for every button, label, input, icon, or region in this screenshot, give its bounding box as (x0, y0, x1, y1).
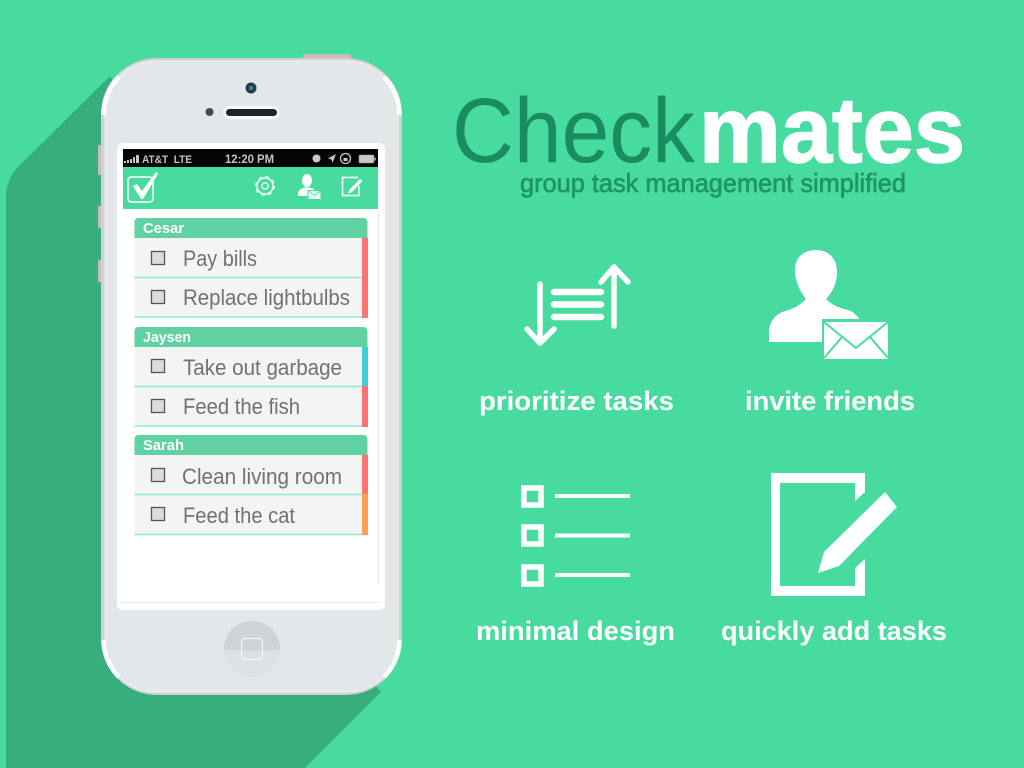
icon: quickly add tasks (771, 473, 897, 596)
icon: invite friends (769, 250, 890, 360)
priority band (362, 238, 368, 318)
status bar (123, 149, 378, 167)
panel: Jaysen group (134, 327, 368, 427)
app nav bar (123, 167, 378, 209)
checkbox: feed the cat (152, 508, 164, 520)
checkbox: clean living room (152, 468, 164, 482)
title word: mates: mates (699, 78, 965, 182)
phone long shadow (6, 76, 381, 768)
group header (134, 218, 368, 238)
task rows (134, 455, 368, 534)
row divider and base line (134, 494, 368, 534)
icon: edit (342, 178, 362, 196)
label: invite friends: invite friends (745, 386, 915, 416)
sensor dot (206, 108, 214, 116)
subtitle: group task management simplified (520, 168, 906, 198)
icon: settings gear (256, 177, 274, 195)
status icons (312, 154, 376, 164)
label: minimal design: minimal design (476, 616, 675, 646)
screen panel (117, 143, 385, 610)
group header (134, 435, 368, 455)
icon: app checkbox logo (128, 172, 158, 202)
title word: Check: Check (452, 80, 696, 182)
label: quickly add tasks: quickly add tasks (721, 616, 947, 646)
icon: minimal design (524, 488, 630, 584)
title (452, 78, 965, 182)
checkbox: replace lightbulbs (152, 290, 164, 304)
group name: Jaysen (143, 329, 191, 346)
task: clean living room: Clean living room (182, 464, 342, 489)
row divider and base line (134, 386, 368, 426)
phone face (105, 61, 398, 692)
camera (246, 82, 256, 94)
checkbox: take out garbage (152, 360, 164, 372)
task: feed the fish: Feed the fish (183, 394, 300, 419)
white corner highlights (104, 77, 400, 677)
task rows (134, 238, 368, 316)
label: prioritize tasks: prioritize tasks (479, 386, 674, 416)
checkbox: pay bills (152, 252, 164, 264)
icon: prioritize tasks (527, 267, 628, 343)
priority band: red (362, 386, 368, 427)
priority band: red (362, 455, 368, 494)
priority band: blue (362, 347, 368, 386)
task: replace lightbulbs: Replace lightbulbs (183, 285, 350, 310)
home button (224, 621, 280, 677)
group name: Sarah (143, 437, 184, 454)
signal bars (124, 155, 139, 163)
task: take out garbage: Take out garbage (183, 355, 342, 380)
phone body rim (101, 58, 402, 695)
checkbox: feed the fish (152, 400, 164, 412)
icon: invite friend (298, 174, 321, 200)
clock: 12:20 PM (225, 154, 274, 166)
carrier text: AT&T LTE (142, 154, 192, 166)
panel: Cesar group (134, 218, 368, 318)
side buttons (98, 54, 351, 282)
task rows (134, 347, 368, 425)
task: feed the cat: Feed the cat (183, 503, 295, 528)
screen hairlines (122, 210, 380, 602)
task: pay bills: Pay bills (183, 246, 257, 271)
panel: Sarah group (134, 435, 368, 535)
row divider and base line (134, 278, 368, 317)
speaker (223, 106, 280, 119)
group header (134, 327, 368, 347)
priority band: orange (362, 494, 368, 535)
phone (98, 54, 402, 695)
group name: Cesar (143, 220, 184, 237)
